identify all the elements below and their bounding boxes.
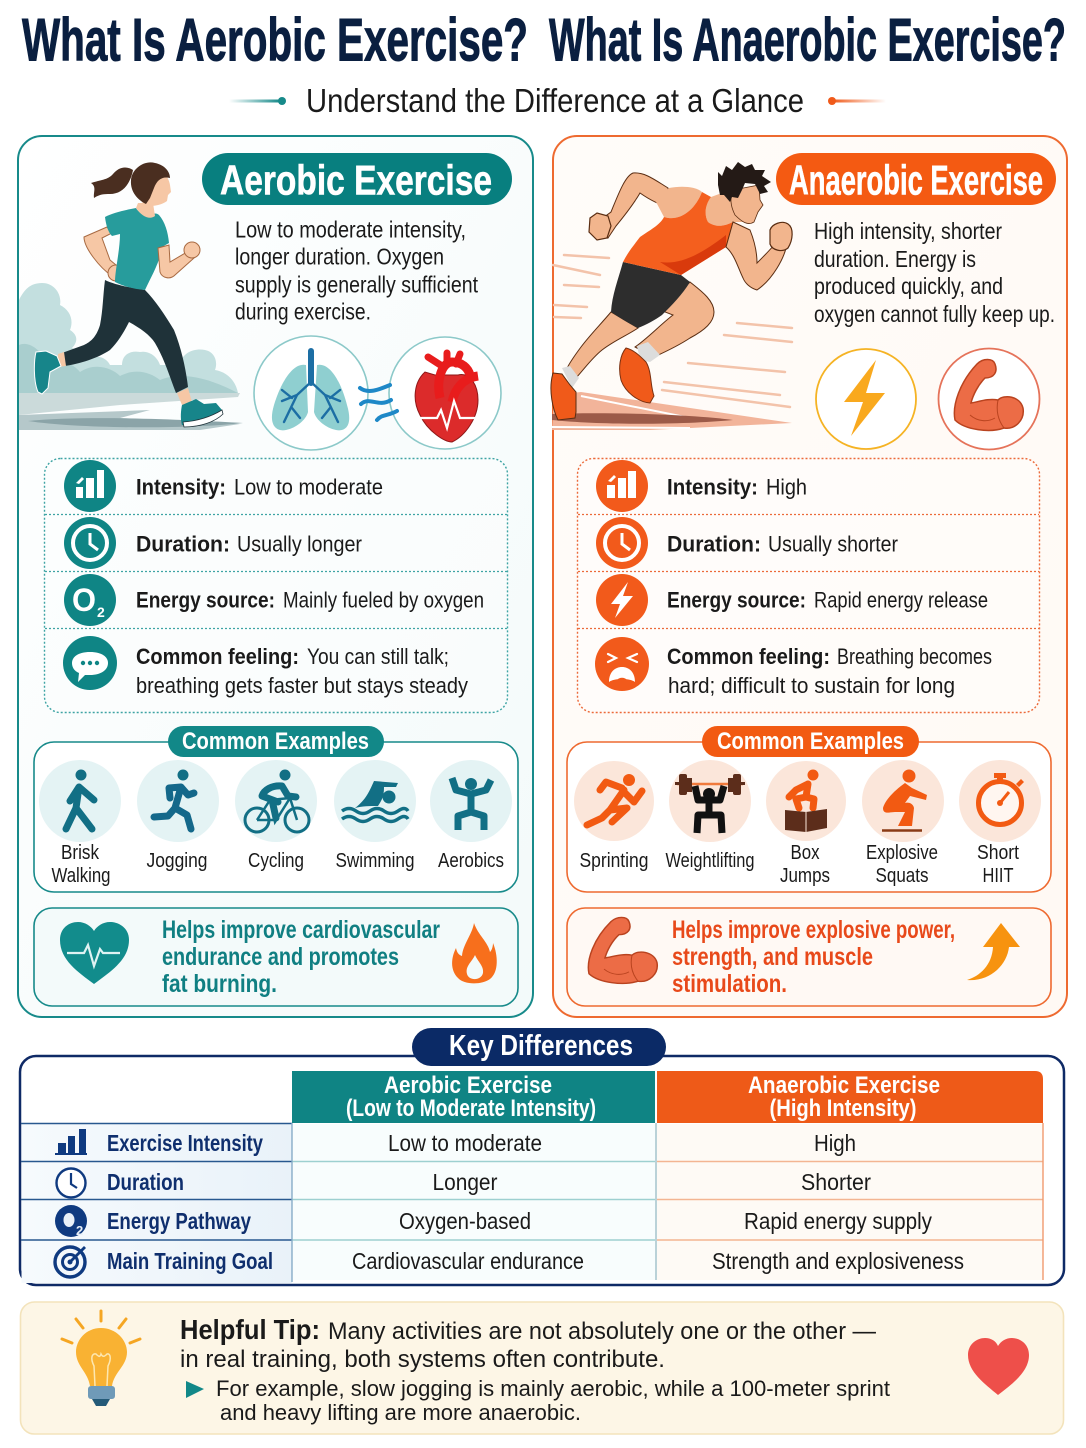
fact: duration: Duration: [667,532,761,556]
column header: anaerobic: Anaerobic Exercise [748,1072,940,1099]
anaerobic description [814,218,1055,327]
fact: duration [596,517,898,569]
example: sprinting: Sprinting [580,850,648,872]
icon: flexed muscle [938,348,1040,450]
tip text: Many activities are not absolutely one or the other — [328,1318,876,1345]
tip text [180,1314,891,1425]
key differences table [20,1028,1064,1285]
column header: anaerobic: (High Intensity) [770,1095,916,1122]
row: energy pathway [55,1205,932,1238]
fact: common feeling: breathing gets faster but stays steady [136,673,469,698]
icon: heart [389,337,501,449]
aerobic heading: Aerobic Exercise [220,156,492,204]
fact: duration [64,517,362,569]
benefit text [672,916,955,998]
icon: heartbeat heart [60,922,129,984]
example: sprinting [574,761,654,872]
icon: light bulb [62,1311,140,1406]
column header: anaerobic [657,1071,1043,1123]
example: cycling: Cycling [248,850,304,872]
panel: anaerobic exercise [551,136,1067,1017]
benefit text: endurance and promotes [162,943,399,971]
icon: lungs [254,336,368,450]
example: short hiit [959,760,1041,887]
example: aerobics [430,760,512,872]
aerobic description [235,216,479,324]
example: jogging: Jogging [146,850,208,872]
illustration: man sprinting [551,162,792,430]
fact: intensity [64,460,383,512]
row: main training goal: Main Training Goal [107,1248,273,1274]
column header: aerobic [292,1071,655,1123]
row: energy pathway: Energy Pathway [107,1208,251,1234]
aerobic benefit callout [34,908,518,1006]
helpful tip panel [20,1302,1064,1434]
fact: intensity: High [766,474,807,500]
fact: energy source: Rapid energy release [814,588,988,612]
fact: common feeling: Common feeling: [667,644,830,669]
row: main training goal: Strength and explosiveness [712,1248,964,1274]
fact: energy source [64,574,484,626]
icon: flame [452,923,497,983]
column header: aerobic: Aerobic Exercise [384,1072,552,1099]
example: cycling [235,760,317,872]
fact: common feeling [63,636,469,698]
illustration: woman jogging [19,162,243,430]
fact: common feeling: Breathing becomes [837,644,992,669]
row: main training goal: Cardiovascular endurance [352,1248,584,1274]
subtitle: Understand the Difference at a Glance [306,82,804,119]
aerobic common examples [34,726,518,892]
aerobic description: supply is generally sufficient [235,272,479,298]
example: brisk walking: Brisk [61,842,100,864]
example: box jumps: Jumps [780,865,830,887]
example: explosive squats: Squats [876,865,928,887]
anaerobic description: High intensity, shorter [814,218,1002,244]
example: swimming [334,760,416,872]
row: exercise intensity [55,1129,856,1156]
row: duration: Duration [107,1169,184,1195]
row labels background [22,1124,292,1283]
example: short hiit: Short [977,842,1019,864]
title: What Is Aerobic Exercise? [22,6,528,74]
row: energy pathway: Oxygen-based [399,1208,531,1234]
row: exercise intensity: Low to moderate [388,1130,542,1156]
anaerobic benefit callout [567,908,1051,1006]
fact: duration: Usually shorter [768,532,898,556]
benefit text: stimulation. [672,970,787,998]
tip text: Helpful Tip: [180,1314,320,1345]
column header: aerobic: (Low to Moderate Intensity) [346,1095,596,1122]
icon: upward arrow [967,923,1020,980]
fact: energy source: O [72,582,96,618]
example: box jumps [766,761,846,887]
benefit text: Helps improve cardiovascular [162,916,440,944]
fact: energy source [596,574,988,626]
row: duration [56,1168,871,1198]
fact: common feeling: You can still talk; [307,644,449,669]
fact: common feeling: Common feeling: [136,644,299,669]
tip text: in real training, both systems often contribute. [180,1346,665,1373]
aerobic facts list [44,458,508,712]
icon: breath arrows between lungs and heart [360,385,397,420]
example: brisk walking [39,760,121,887]
fact: duration: Duration: [136,532,230,556]
anaerobic description: produced quickly, and [814,273,1003,299]
row: duration: Longer [432,1169,498,1195]
tip text: and heavy lifting are more anaerobic. [220,1400,581,1425]
benefit text: Helps improve explosive power, [672,916,955,944]
benefit text: fat burning. [162,970,277,998]
example: weightlifting: Weightlifting [666,850,754,872]
key differences heading: Key Differences [449,1030,633,1062]
example: weightlifting [666,760,754,872]
fact: duration: Usually longer [237,532,362,556]
example: explosive squats [862,760,944,887]
tip text: For example, slow jogging is mainly aerobic, while a 100-meter sprint [216,1376,891,1401]
fact: intensity: Intensity: [667,474,758,500]
example: brisk walking: Walking [52,865,110,887]
example: aerobics: Aerobics [438,850,504,872]
aerobic description: longer duration. Oxygen [235,244,444,270]
benefit text [162,916,440,998]
row: energy pathway: 2 [76,1223,83,1238]
example: swimming: Swimming [336,850,414,872]
fact: common feeling: hard; difficult to sustain for long [668,673,955,698]
fact: intensity [596,460,807,512]
row: main training goal [55,1247,964,1277]
icon: red heart [968,1338,1029,1395]
aerobic values background [293,1124,655,1280]
row: exercise intensity: Exercise Intensity [107,1130,263,1156]
anaerobic common examples [567,726,1051,892]
examples heading: Common Examples [182,728,369,755]
fact: intensity: Low to moderate [234,474,383,500]
row: exercise intensity: High [814,1130,856,1156]
aerobic description: during exercise. [235,298,371,324]
example: short hiit: HIIT [982,865,1014,887]
row: energy pathway: Rapid energy supply [744,1208,932,1234]
example: box jumps: Box [790,842,820,864]
fact: intensity: Intensity: [136,474,226,500]
example: jogging [137,760,219,872]
anaerobic values background [657,1124,1043,1280]
aerobic description: Low to moderate intensity, [235,216,466,242]
benefit text: strength, and muscle [672,943,873,971]
example: explosive squats: Explosive [866,842,938,864]
fact: energy source: 2 [97,604,105,620]
icon: muscle arm [588,917,657,983]
icon: lightning bolt [816,349,916,449]
fact: common feeling [595,637,992,698]
panel: aerobic exercise [18,136,533,1017]
fact: energy source: Mainly fueled by oxygen [283,588,484,612]
fact: energy source: Energy source: [136,588,275,612]
anaerobic facts list [578,458,1040,712]
fact: energy source: Energy source: [667,588,806,612]
anaerobic description: duration. Energy is [814,246,976,272]
row: duration: Shorter [801,1169,871,1195]
examples heading: Common Examples [717,728,904,755]
